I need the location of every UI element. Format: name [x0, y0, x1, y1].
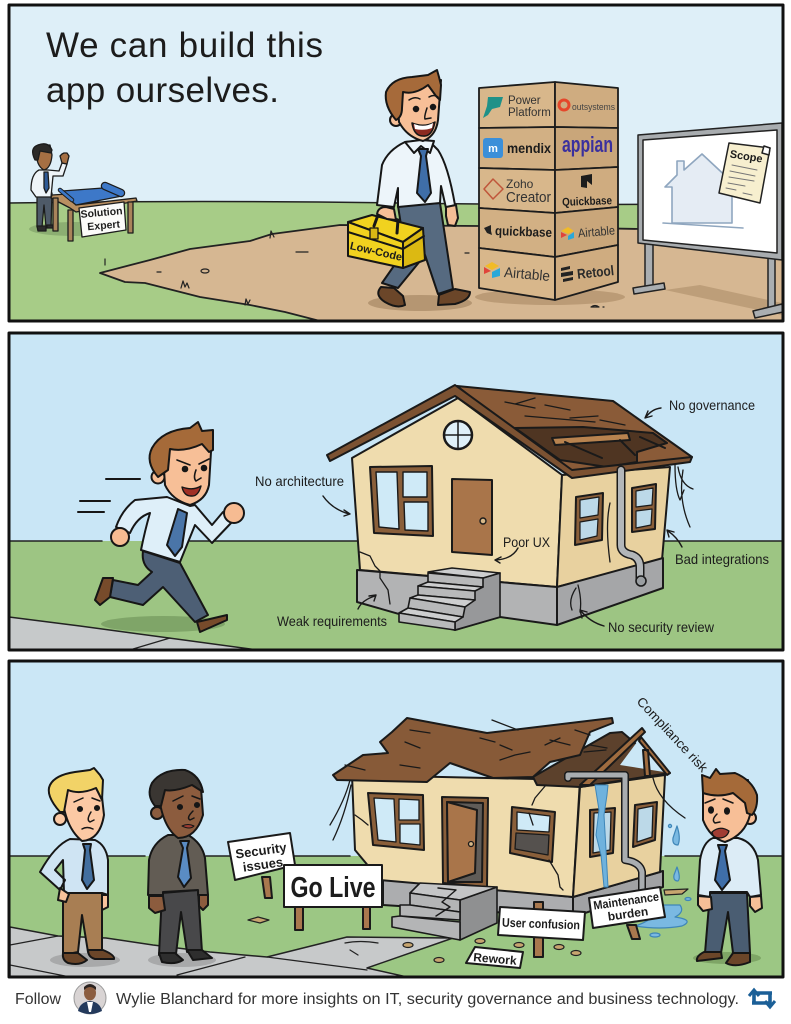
grass [9, 856, 783, 977]
outsystems [559, 100, 615, 113]
sign: rework [466, 947, 523, 968]
trousers [110, 551, 208, 622]
sky [9, 661, 783, 861]
sign: maintenance burden: Maintenance [593, 889, 660, 913]
avatar [74, 982, 106, 1014]
left faces [479, 82, 555, 128]
panel: running to build a flawed house [9, 333, 783, 650]
airtable left: Airtable [503, 265, 551, 285]
stairs [399, 568, 500, 630]
sign: user confusion [498, 902, 585, 957]
shingle lines [345, 720, 607, 770]
hands [58, 888, 108, 910]
facial features [173, 796, 200, 828]
grin [182, 486, 201, 496]
left hand [111, 528, 129, 546]
hair [150, 770, 203, 806]
rubble stones [248, 889, 688, 962]
shoes [159, 950, 212, 963]
sign: solution expert: Solution [80, 205, 123, 221]
zoho creator [484, 177, 551, 206]
smile [412, 122, 435, 136]
hand on toolbox handle [377, 207, 396, 220]
tie [44, 172, 49, 193]
water puddle [635, 824, 691, 937]
grass [9, 541, 783, 650]
sign: security issues: Security [235, 839, 288, 862]
retool [561, 262, 615, 282]
face [162, 435, 212, 505]
downspout [621, 470, 640, 580]
power platform: Platform [508, 107, 551, 119]
face [158, 778, 203, 838]
quickbase right [562, 174, 612, 209]
shirt [698, 838, 761, 897]
panel: go live with collapsed house [9, 661, 783, 977]
flaw annotations: Weak requirements [277, 613, 387, 629]
shingle lines [505, 398, 625, 425]
eave [327, 385, 692, 478]
front foundation [357, 570, 557, 630]
ear [152, 470, 164, 484]
left window [368, 793, 424, 850]
side foundation [573, 871, 663, 917]
shadow [29, 222, 121, 236]
speed lines [78, 479, 140, 512]
shadow [101, 616, 225, 632]
door [452, 479, 492, 555]
sign: user confusion: User confusion [502, 916, 580, 932]
zoho creator: Zoho [506, 177, 534, 191]
grass [10, 200, 638, 320]
flaw annotations: No security review [608, 619, 715, 635]
front foundation [383, 878, 573, 917]
side windows [575, 484, 656, 545]
shirt [31, 163, 67, 197]
power platform [483, 95, 551, 119]
dark-haired man [148, 770, 216, 967]
flaw annotations: No architecture [255, 473, 344, 489]
footer: follow line: Wylie Blanchard for more insights on IT, security governance and business technology. [116, 991, 739, 1008]
mendix: mendix [507, 140, 551, 156]
side wall [557, 467, 670, 587]
sign: go live: Go Live [290, 872, 376, 904]
quickbase right: Quickbase [562, 195, 612, 209]
running man [78, 422, 244, 632]
panel: we can build this ourselves [9, 5, 783, 321]
hair [49, 768, 103, 812]
hands [149, 895, 208, 913]
side wall [573, 775, 665, 897]
go live signs [228, 833, 665, 968]
shoes [37, 225, 54, 231]
face [62, 778, 104, 841]
lot pebbles and grass tufts [105, 231, 604, 307]
shirt [40, 839, 108, 895]
repost icon [749, 990, 775, 1007]
side windows [590, 802, 657, 857]
trousers [159, 890, 202, 955]
facial features [74, 798, 100, 829]
flaw annotations: No governance [669, 397, 755, 413]
shoes [63, 950, 114, 964]
sign: maintenance burden [589, 887, 665, 939]
sky [9, 5, 783, 205]
sign: security issues: issues [242, 854, 284, 875]
tie [715, 845, 730, 890]
sky [9, 333, 783, 543]
ear [390, 114, 402, 126]
title [46, 26, 323, 110]
cracks and loose wires [360, 465, 693, 612]
neck and face [397, 80, 441, 141]
tie [178, 841, 191, 887]
airtable right: Airtable [577, 223, 616, 241]
appian: appian [562, 132, 613, 157]
sign: go live [284, 865, 382, 930]
face [703, 780, 750, 842]
tie [417, 149, 431, 202]
dirt lot [100, 225, 783, 321]
rafters [580, 728, 670, 785]
sign: solution expert [79, 202, 126, 237]
trousers [705, 893, 750, 953]
blueprint [62, 188, 122, 205]
blond man [40, 768, 120, 967]
facial features [705, 799, 733, 838]
pipe [568, 775, 642, 890]
ear [744, 812, 756, 824]
airtable left [484, 262, 551, 285]
sign: rework: Rework [473, 950, 518, 968]
flaw annotations [255, 397, 769, 635]
sign: maintenance burden: burden [607, 904, 649, 924]
hair [33, 144, 52, 160]
title: app ourselves. [46, 71, 279, 110]
toolbox label: Low-Code [349, 240, 403, 264]
sidewalk [9, 617, 258, 650]
house sketch [665, 154, 732, 223]
table [51, 194, 137, 212]
sky through the hole [620, 738, 664, 772]
right fist [224, 503, 244, 523]
shirt [377, 140, 455, 208]
right faces [555, 82, 618, 128]
waving hand [60, 153, 69, 164]
title: We can build this [46, 26, 323, 65]
ear [54, 813, 66, 825]
roof hole [515, 427, 667, 467]
man with toolbox [348, 70, 472, 311]
solution expert with table [29, 144, 137, 241]
footer: follow line [15, 982, 775, 1014]
shirt [116, 497, 232, 562]
eyes and brows [177, 459, 209, 481]
front window [370, 466, 433, 536]
hair [150, 422, 213, 477]
roof boards [552, 433, 665, 458]
sign: solution expert: Expert [87, 218, 121, 233]
arrows [323, 408, 682, 626]
hair [386, 70, 441, 120]
shoes [697, 952, 750, 965]
flaw annotations: Bad integrations [675, 551, 769, 567]
power platform: Power [508, 95, 541, 107]
front wall [352, 775, 580, 897]
house with flaws [327, 385, 693, 630]
outsystems: outsystems [572, 102, 615, 113]
zoho creator: Creator [506, 190, 551, 206]
legs [645, 243, 775, 310]
eyes, brows and nose [409, 96, 438, 119]
quickbase left: quickbase [495, 223, 552, 240]
scope document: Scope [729, 149, 763, 166]
trousers [63, 890, 102, 955]
ear [151, 807, 163, 819]
broken window [510, 807, 555, 862]
broken stairs [392, 883, 497, 940]
mendix [483, 138, 551, 158]
compliance risk label: Compliance risk [634, 694, 711, 775]
worried man with tie [693, 769, 762, 965]
stack of low-code platform boxes [475, 82, 625, 305]
toolbox [348, 207, 425, 268]
airtable right [561, 223, 616, 241]
shirt [148, 835, 208, 895]
sign: security issues [228, 833, 295, 898]
whiteboard with house sketch [633, 123, 783, 318]
mendix: m [488, 143, 498, 155]
footer: follow line: Follow [15, 991, 62, 1008]
side foundation [557, 558, 663, 625]
free hand [446, 205, 458, 226]
shoes [378, 287, 470, 306]
cracks and wires [330, 778, 685, 890]
tie [167, 509, 187, 556]
water drops [673, 826, 679, 845]
whiteboard shadow [665, 285, 782, 315]
dark interior and gable [533, 732, 670, 787]
broken door [442, 797, 488, 887]
hair [702, 769, 757, 815]
round window [444, 421, 472, 449]
retool: Retool [576, 262, 615, 282]
roof [333, 718, 613, 782]
collar [405, 140, 434, 153]
trousers [382, 203, 453, 294]
tie [82, 844, 94, 889]
shadow [368, 295, 472, 311]
collapsed house [330, 718, 685, 940]
flaw annotations: Poor UX [503, 534, 551, 550]
shoes [95, 578, 227, 632]
water leak [595, 785, 608, 887]
hands [698, 896, 762, 912]
sidewalk and cracked walkway [10, 927, 453, 977]
scope document [719, 143, 770, 203]
trousers [37, 193, 52, 227]
front wall [352, 398, 562, 587]
face [36, 145, 52, 170]
board [638, 123, 782, 260]
roof plane [457, 386, 692, 476]
